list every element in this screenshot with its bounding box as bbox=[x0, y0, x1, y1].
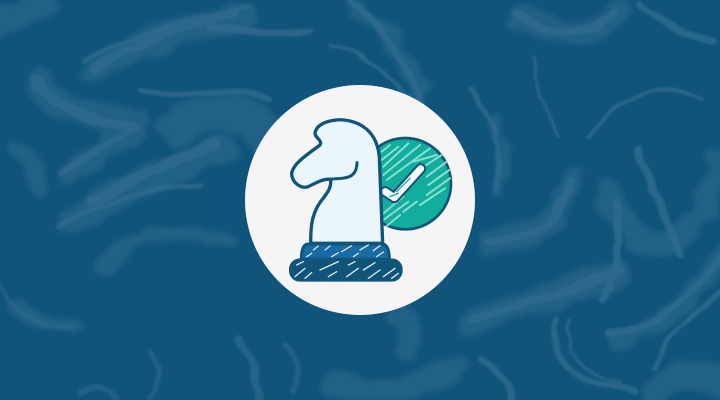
white circle badge bbox=[245, 85, 475, 315]
icon: teal check circle bbox=[360, 138, 451, 229]
knight upper base bbox=[301, 244, 389, 259]
knight body bbox=[292, 120, 383, 243]
knight icon bbox=[290, 120, 451, 281]
icon: check mark bbox=[385, 169, 421, 198]
knight lower base bbox=[290, 259, 402, 281]
